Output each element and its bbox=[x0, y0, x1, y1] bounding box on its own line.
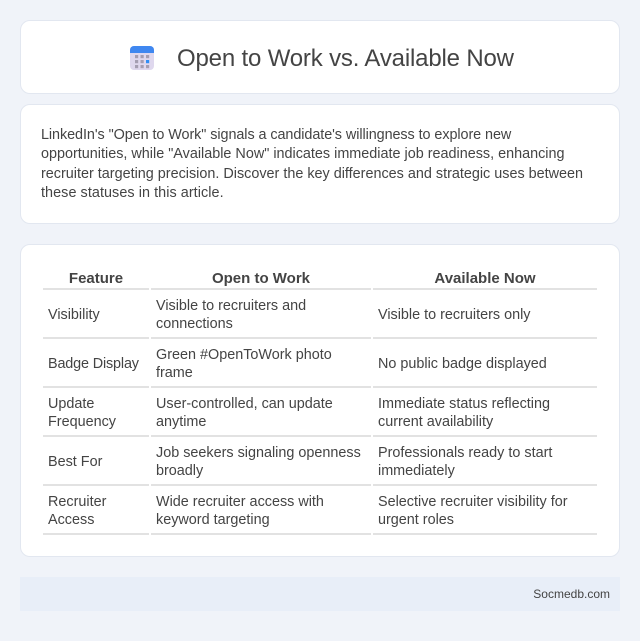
panel: title card bbox=[20, 20, 620, 94]
row: update frequency: Update bbox=[48, 396, 94, 412]
text: introduction paragraph: opportunities, while "Available Now" indicates immediate job readiness, enhancing bbox=[41, 146, 565, 162]
row: visibility: Visibility bbox=[48, 307, 100, 323]
row: update frequency: anytime bbox=[156, 414, 206, 430]
row: visibility bbox=[48, 298, 530, 332]
panel: comparison table bbox=[20, 244, 620, 557]
row: update frequency: Immediate status reflecting bbox=[378, 396, 550, 412]
row: visibility: Visible to recruiters only bbox=[378, 307, 530, 323]
icon: calendar bbox=[130, 46, 154, 70]
row: badge display: Green #OpenToWork photo bbox=[156, 347, 332, 363]
row: recruiter access: Selective recruiter visibility for bbox=[378, 494, 568, 510]
row: recruiter access: Recruiter bbox=[48, 494, 106, 510]
row: best for: Job seekers signaling openness bbox=[156, 445, 361, 461]
row: recruiter access: Wide recruiter access with bbox=[156, 494, 324, 510]
row: badge display bbox=[48, 347, 547, 381]
row: recruiter access: urgent roles bbox=[378, 512, 454, 528]
text: introduction paragraph: recruiter targeting precision. Discover the key differences and strategic uses between bbox=[41, 166, 583, 182]
row: visibility: connections bbox=[156, 316, 233, 332]
row: update frequency bbox=[48, 396, 550, 430]
row: update frequency: Frequency bbox=[48, 414, 116, 430]
table header: Feature bbox=[69, 270, 123, 287]
row: update frequency: current availability bbox=[378, 414, 493, 430]
text: introduction paragraph bbox=[41, 126, 583, 201]
footer text: Socmedb.com bbox=[533, 587, 610, 601]
row: best for: Professionals ready to start bbox=[378, 445, 552, 461]
table header: Open to Work bbox=[212, 270, 310, 287]
row: best for: broadly bbox=[156, 463, 203, 479]
row: best for: immediately bbox=[378, 463, 455, 479]
row: best for bbox=[48, 445, 552, 479]
row: badge display: frame bbox=[156, 365, 193, 381]
text: introduction paragraph: LinkedIn's "Open to Work" signals a candidate's willingness to explore new bbox=[41, 126, 511, 142]
table header: Available Now bbox=[434, 270, 536, 287]
panel: introduction bbox=[20, 104, 620, 224]
row: badge display: Badge Display bbox=[48, 356, 139, 372]
row: update frequency: User-controlled, can update bbox=[156, 396, 333, 412]
row: recruiter access bbox=[48, 494, 568, 528]
row: recruiter access: keyword targeting bbox=[156, 512, 270, 528]
row: recruiter access: Access bbox=[48, 512, 94, 528]
table header bbox=[69, 270, 536, 287]
row: visibility: Visible to recruiters and bbox=[156, 298, 306, 314]
text: introduction paragraph: these statuses in this article. bbox=[41, 185, 224, 201]
footer bar bbox=[20, 577, 620, 611]
row: best for: Best For bbox=[48, 454, 102, 470]
row: badge display: No public badge displayed bbox=[378, 356, 547, 372]
title: Open to Work vs. Available Now bbox=[177, 45, 514, 72]
